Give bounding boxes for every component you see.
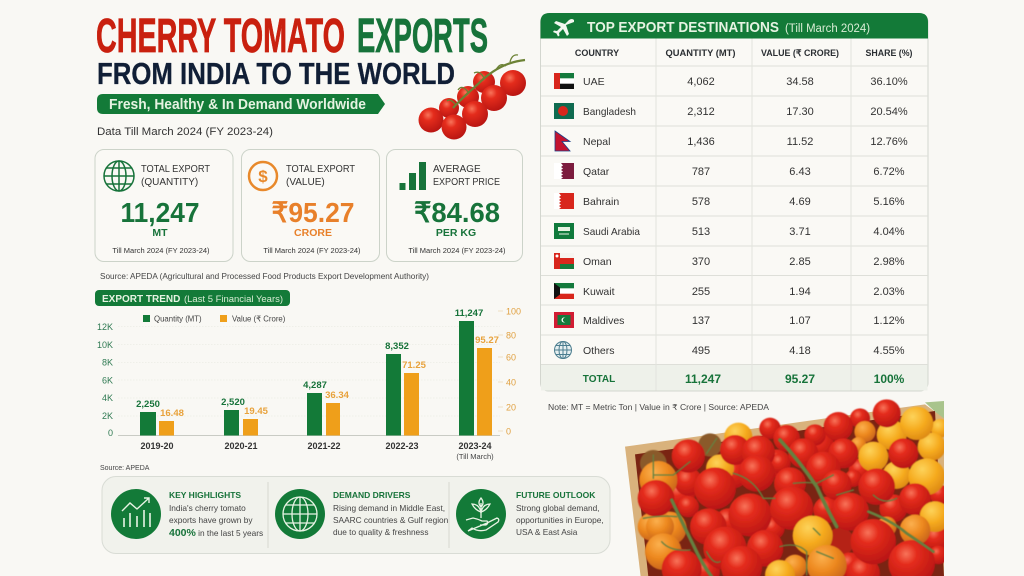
panel: average export price: ₹84.68 — [414, 197, 500, 228]
country names: Saudi Arabia — [583, 226, 640, 238]
country names: UAE — [583, 76, 605, 88]
legend — [143, 314, 286, 324]
title: CHERRY TOMATO — [96, 10, 345, 63]
value column: 4.69 — [789, 196, 811, 208]
country names: Oman — [583, 256, 612, 268]
panel: average export price: EXPORT PRICE — [433, 177, 500, 188]
year labels: 2019-20 — [140, 441, 174, 451]
panel: total export quantity: (QUANTITY) — [141, 177, 198, 188]
column headers: SHARE (%) — [866, 48, 912, 58]
right axis — [506, 306, 521, 436]
bar values: 2,520 — [221, 397, 245, 408]
flags — [554, 73, 574, 358]
bar chart: export trend: 36.34 — [325, 390, 350, 401]
demand drivers: due to quality & freshness — [333, 527, 428, 537]
panel: total export quantity: TOTAL EXPORT — [141, 164, 210, 175]
value column: 2.85 — [789, 256, 811, 268]
photo: crate of cherry tomatoes — [625, 399, 950, 576]
bar chart: export trend: 95.27 — [475, 335, 499, 346]
icon: bars — [400, 162, 426, 190]
year labels: 2022-23 — [385, 441, 419, 451]
left axis: 8K — [102, 358, 113, 368]
key highlights: exports have grown by — [169, 515, 253, 525]
future outlook: opportunities in Europe, — [516, 515, 604, 525]
panel: average export price: PER KG — [436, 227, 476, 239]
legend: Quantity (MT) — [154, 314, 202, 324]
value column: 11.52 — [787, 136, 813, 148]
export trend heading: (Last 5 Financial Years) — [184, 294, 283, 304]
Others globe — [554, 342, 572, 358]
total row: 95.27 — [785, 372, 815, 386]
share column: 12.76% — [870, 136, 908, 148]
key highlights: 400% in the last 5 years — [169, 527, 263, 539]
key highlights: India's cherry tomato — [169, 503, 246, 513]
quantity column: 1,436 — [687, 136, 715, 148]
panel: total export value: (VALUE) — [286, 177, 325, 188]
bar chart: export trend: (Till March) — [456, 452, 494, 461]
value column: 1.94 — [789, 286, 811, 298]
Nepal flag — [555, 131, 570, 151]
bar chart: export trend: 71.25 — [402, 360, 427, 371]
total row: TOTAL — [583, 374, 615, 385]
panel: total export value: CRORE — [294, 227, 332, 239]
share column: 6.72% — [873, 166, 905, 178]
table note: Note: MT = Metric Ton | Value in ₹ Crore | Source: APEDA — [548, 403, 770, 412]
demand drivers: Rising demand in Middle East, — [333, 503, 445, 513]
quantity column: 495 — [692, 345, 710, 357]
year labels: 2023-24 — [458, 441, 492, 451]
country names: Others — [583, 345, 615, 357]
export trend heading: EXPORT TREND — [102, 294, 180, 305]
value column: 4.18 — [789, 345, 811, 357]
future outlook: FUTURE OUTLOOK — [516, 490, 596, 500]
quantity column: 787 — [692, 166, 710, 178]
bar values: 8,352 — [385, 341, 409, 352]
country names: Qatar — [583, 166, 610, 178]
UAE flag — [554, 73, 574, 89]
panel: highlights strip — [102, 476, 610, 554]
share column: 36.10% — [870, 76, 908, 88]
future outlook: USA & East Asia — [516, 527, 578, 537]
value column: 17.30 — [786, 106, 814, 118]
title: FROM INDIA TO THE WORLD — [97, 56, 455, 91]
future outlook — [456, 489, 604, 539]
left axis: 0 — [108, 428, 113, 438]
Qatar flag — [554, 163, 574, 179]
panel: average export price: Till March 2024 (FY 2023-24) — [408, 246, 506, 255]
total row background — [541, 364, 928, 390]
country names: Bahrain — [583, 196, 619, 208]
bar chart: export trend: 19.45 — [244, 406, 269, 417]
panel: average export price: AVERAGE — [433, 164, 481, 175]
panel: total export quantity: 11,247 — [120, 197, 200, 228]
panel: total export value — [242, 150, 380, 262]
panel: total export quantity — [95, 150, 233, 262]
bar values: 4,287 — [303, 380, 327, 391]
quantity column: 4,062 — [687, 76, 715, 88]
panel: top export destinations table — [540, 13, 928, 391]
column headers: COUNTRY — [575, 48, 619, 58]
left axis: 12K — [97, 322, 113, 332]
value column — [786, 76, 814, 357]
country names: Nepal — [583, 136, 610, 148]
value column: 1.07 — [789, 315, 811, 327]
value column: 3.71 — [789, 226, 811, 238]
share column: 4.04% — [873, 226, 905, 238]
country names: Bangladesh — [583, 106, 636, 118]
share column: 20.54% — [870, 106, 908, 118]
Oman flag — [554, 253, 574, 269]
year labels: 2021-22 — [307, 441, 341, 451]
share column — [870, 76, 908, 357]
total row: 11,247 — [685, 372, 721, 386]
panel: average export price — [386, 150, 522, 262]
Saudi Arabia flag — [554, 223, 574, 239]
Maldives flag — [554, 312, 574, 328]
demand drivers: SAARC countries & Gulf region — [333, 515, 449, 525]
panel: total export quantity: Till March 2024 (FY 2023-24) — [112, 246, 210, 255]
table header bar: TOP EXPORT DESTINATIONS — [587, 19, 779, 36]
future outlook: Strong global demand, — [516, 503, 600, 513]
tagline ribbon: Fresh, Healthy & In Demand Worldwide — [109, 97, 366, 113]
data period: Data Till March 2024 (FY 2023-24) — [97, 126, 273, 138]
country names: Kuwait — [583, 286, 615, 298]
quantity column — [687, 76, 715, 357]
quantity column: 255 — [692, 286, 710, 298]
year labels: 2020-21 — [224, 441, 258, 451]
key highlights: KEY HIGHLIGHTS — [169, 490, 241, 500]
export trend heading — [95, 290, 290, 306]
icon: plane — [553, 19, 574, 36]
right axis: 40 — [506, 378, 516, 388]
table header bar: (Till March 2024) — [785, 23, 870, 35]
panel: total export value: Till March 2024 (FY 2023-24) — [263, 246, 361, 255]
value column: 6.43 — [789, 166, 811, 178]
share column: 1.12% — [873, 315, 905, 327]
left axis: 4K — [102, 393, 113, 403]
right axis: 0 — [506, 426, 511, 436]
icon: cherry tomato vine — [418, 55, 526, 140]
share column: 5.16% — [873, 196, 905, 208]
country names — [583, 76, 640, 357]
year labels — [140, 441, 492, 451]
demand drivers: DEMAND DRIVERS — [333, 490, 411, 500]
bar chart: export trend — [97, 306, 521, 461]
Bangladesh flag — [554, 103, 574, 119]
panel: total export quantity: MT — [152, 227, 168, 239]
bar values — [136, 308, 483, 410]
panel: total export value: TOTAL EXPORT — [286, 164, 355, 175]
bar values: 11,247 — [455, 308, 483, 319]
share column: 2.03% — [873, 286, 905, 298]
column headers — [575, 48, 912, 58]
quantity column: 513 — [692, 226, 710, 238]
right axis: 60 — [506, 352, 516, 362]
right axis: 100 — [506, 306, 521, 316]
title — [96, 10, 488, 91]
key highlights — [111, 489, 263, 539]
source note: Source: APEDA (Agricultural and Processed Food Products Export Development Authority) — [100, 272, 429, 281]
panel: total export value: ₹95.27 — [272, 197, 354, 228]
quantity column: 578 — [692, 196, 710, 208]
value column: 34.58 — [786, 76, 814, 88]
column headers: VALUE (₹ CRORE) — [761, 48, 839, 58]
Kuwait flag — [554, 283, 574, 299]
left axis: 2K — [102, 411, 113, 421]
table header bar — [540, 13, 928, 38]
left axis: 6K — [102, 376, 113, 386]
share column: 4.55% — [873, 345, 905, 357]
quantity column: 137 — [692, 315, 710, 327]
Bahrain flag — [554, 193, 574, 209]
total row — [583, 372, 905, 386]
right axis: 80 — [506, 330, 516, 340]
left axis: 10K — [97, 340, 113, 350]
title: EXPORTS — [357, 10, 488, 63]
demand drivers — [275, 489, 449, 539]
quantity column: 2,312 — [687, 106, 715, 118]
country names: Maldives — [583, 315, 624, 327]
quantity column: 370 — [692, 256, 710, 268]
right axis: 20 — [506, 402, 516, 412]
legend: Value (₹ Crore) — [232, 314, 286, 324]
chart source: Source: APEDA — [100, 465, 150, 472]
icon: dollar coin: $ — [258, 167, 268, 186]
bars — [140, 321, 474, 436]
left axis — [97, 322, 113, 438]
column headers: QUANTITY (MT) — [666, 48, 736, 58]
share column: 2.98% — [873, 256, 905, 268]
icon: globe — [104, 161, 134, 191]
bar values: 2,250 — [136, 399, 160, 410]
total row: 100% — [874, 372, 905, 386]
bar chart: export trend: 16.48 — [160, 408, 184, 419]
